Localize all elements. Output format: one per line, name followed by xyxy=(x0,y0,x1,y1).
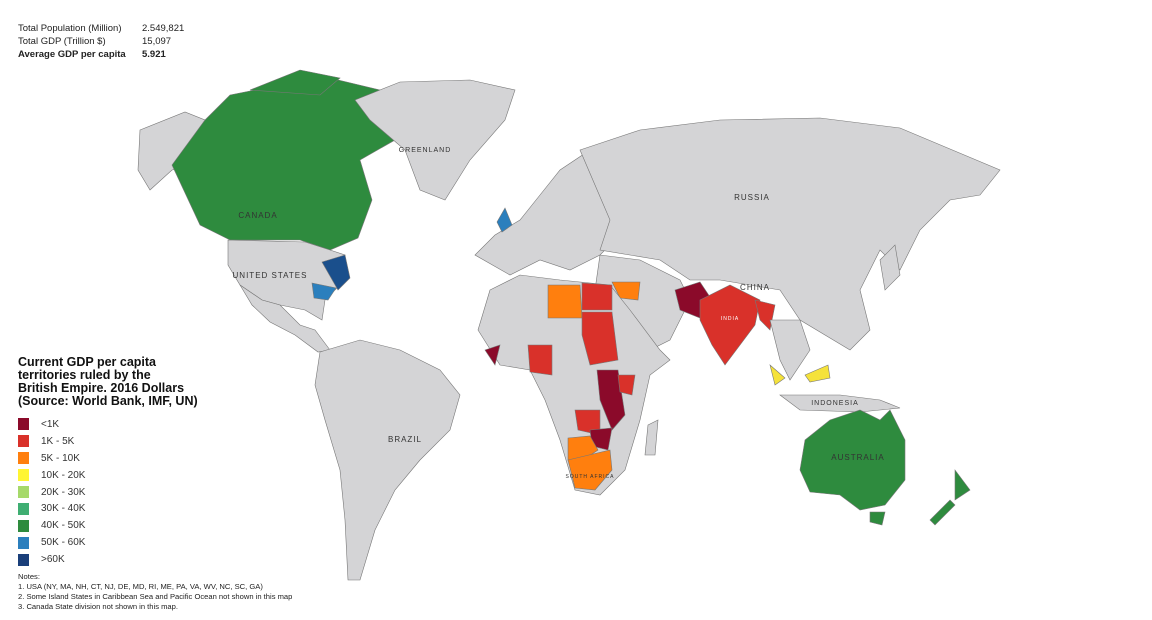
canada xyxy=(172,78,400,250)
uk/ireland xyxy=(497,208,512,232)
world map: UNITED STATES xyxy=(233,271,307,280)
world map: AUSTRALIA xyxy=(831,453,885,462)
usa xyxy=(228,240,345,320)
stats block: 15,097 xyxy=(142,36,171,47)
afghanistan/pakistan xyxy=(675,282,712,318)
stats block: Average GDP per capita xyxy=(18,49,126,60)
legend title xyxy=(18,355,198,408)
japan xyxy=(880,245,900,290)
world map: BRAZIL xyxy=(388,435,422,444)
russia / asia xyxy=(580,118,1000,350)
legend items: 5K - 10K xyxy=(41,453,80,464)
stats block: Total GDP (Trillion $) xyxy=(18,36,106,47)
notes: 1. USA (NY, MA, NH, CT, NJ, DE, MD, RI, ME, PA, VA, WV, NC, SC, GA) xyxy=(18,582,263,591)
notes: Notes: xyxy=(18,572,40,581)
greenland xyxy=(355,80,515,200)
new zealand xyxy=(930,470,970,525)
legend items: 40K - 50K xyxy=(41,520,85,531)
world map: GREENLAND xyxy=(399,147,451,154)
world map: CANADA xyxy=(238,211,278,220)
world map: RUSSIA xyxy=(734,193,770,202)
legend title: territories ruled by the xyxy=(18,368,151,382)
indonesia xyxy=(780,395,900,412)
us east blue xyxy=(322,255,350,290)
india xyxy=(700,285,760,365)
legend xyxy=(18,355,198,566)
notes: 3. Canada State division not shown in this map. xyxy=(18,602,178,611)
south america xyxy=(315,340,460,580)
stats block xyxy=(18,23,184,60)
stats block: 5.921 xyxy=(142,49,166,60)
legend title: British Empire. 2016 Dollars xyxy=(18,381,184,395)
world map: CHINA xyxy=(740,283,770,292)
mexico / central america xyxy=(240,285,330,352)
legend items: 20K - 30K xyxy=(41,486,85,498)
se asia xyxy=(770,320,810,380)
alaska xyxy=(138,112,205,190)
notes xyxy=(18,572,292,611)
australia xyxy=(800,410,905,510)
legend items: 30K - 40K xyxy=(41,503,85,514)
legend title: (Source: World Bank, IMF, UN) xyxy=(18,394,198,408)
legend items xyxy=(18,418,86,566)
legend items: 10K - 20K xyxy=(41,470,85,481)
world map: INDONESIA xyxy=(811,400,859,407)
legend items: >60K xyxy=(41,554,65,565)
madagascar xyxy=(645,420,658,455)
legend items: <1K xyxy=(41,419,59,430)
legend items: 1K - 5K xyxy=(41,436,74,447)
stats block: 2.549,821 xyxy=(142,23,184,34)
notes: 2. Some Island States in Caribbean Sea and Pacific Ocean not shown in this map xyxy=(18,592,292,601)
stats block: Total Population (Million) xyxy=(18,23,122,34)
middle east xyxy=(595,255,690,355)
world map: INDIA xyxy=(721,316,739,322)
africa xyxy=(478,275,670,495)
world map: SOUTH AFRICA xyxy=(566,474,614,480)
legend items: 50K - 60K xyxy=(41,537,85,548)
europe xyxy=(475,150,625,275)
legend title: Current GDP per capita xyxy=(18,355,156,369)
